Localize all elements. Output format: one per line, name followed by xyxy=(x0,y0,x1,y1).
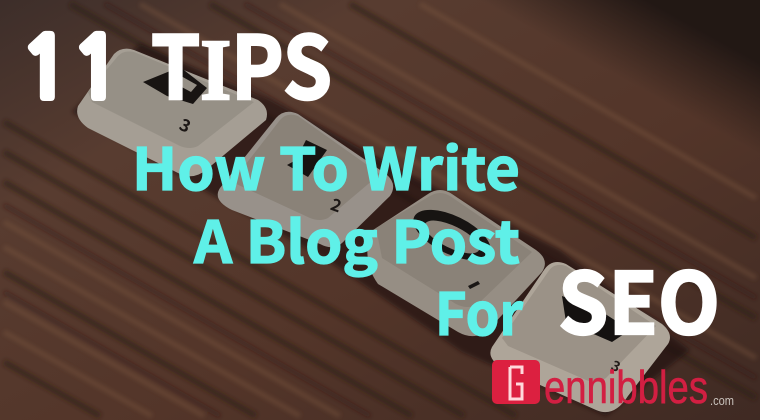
tile number 2: 2 xyxy=(328,190,346,217)
shadows beneath tiles xyxy=(72,44,690,416)
title: 11 TIPS xyxy=(20,0,332,125)
logo: Gennibbles.com xyxy=(492,360,734,413)
tile: letter B xyxy=(77,49,267,176)
tile: letter O xyxy=(367,190,545,336)
title: SEO: SEO xyxy=(558,236,720,359)
line: For: For xyxy=(435,268,524,352)
line: How To Write: How To Write xyxy=(132,123,520,207)
logo wordmark: ennibbles xyxy=(544,361,708,413)
tile number 3: 3 xyxy=(608,355,624,377)
logo suffix: .com xyxy=(710,393,734,408)
line: A Blog Post: A Blog Post xyxy=(193,196,520,280)
logo badge: G xyxy=(492,360,540,404)
tile: letter S xyxy=(490,262,670,412)
tile: letter L xyxy=(218,112,393,247)
letter glyph O xyxy=(406,200,498,270)
letter glyph L xyxy=(287,140,327,177)
heading: How To Write A Blog Post For xyxy=(132,123,524,352)
dark corner, top right xyxy=(400,0,760,200)
letter glyph B xyxy=(143,67,207,104)
title: 11 TIPS: TIPS xyxy=(151,0,332,125)
title: 11 TIPS: 11 xyxy=(20,27,122,111)
tile number mark xyxy=(468,281,480,289)
tile number 3: 3 xyxy=(176,111,196,138)
letter glyph S xyxy=(562,296,630,342)
